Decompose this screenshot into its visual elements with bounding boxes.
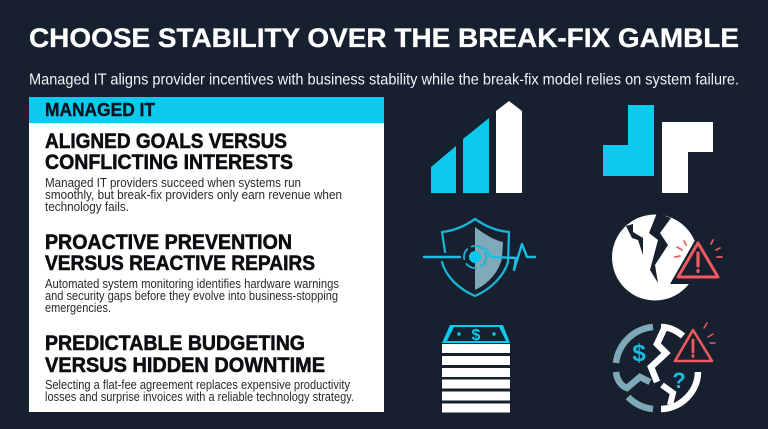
heading: aligned goals: ALIGNED GOALS VERSUS [45,130,287,153]
text: predictable budgeting description: losses and surprise invoices with a reliable technology strategy. [45,389,354,404]
icon: cracked circle with warning [612,213,726,300]
icon: broken budget ring with warning: $ [632,340,646,367]
icon: broken budget ring with warning: ? [672,368,686,393]
heading: proactive prevention [45,231,315,275]
heading: proactive prevention: VERSUS REACTIVE REPAIRS [45,252,315,275]
icon: rising bars [431,101,522,193]
panel background [29,97,384,412]
text: proactive prevention description: Automated system monitoring identifies hardware warnings [45,276,339,291]
heading: aligned goals [45,130,293,174]
icon: broken budget ring with warning [616,323,715,409]
heading: predictable budgeting: VERSUS HIDDEN DOWNTIME [45,354,325,377]
section: predictable budgeting [45,332,354,404]
text: aligned goals description: technology fails. [45,199,129,214]
text: proactive prevention description: emergencies. [45,300,111,315]
icon: shield with heartbeat [424,219,535,296]
heading: aligned goals: CONFLICTING INTERESTS [45,151,293,174]
heading: predictable budgeting [45,332,325,377]
section: aligned goals [45,130,342,214]
title: CHOOSE STABILITY OVER THE BREAK-FIX GAMBLE [29,23,739,53]
text: proactive prevention description: and security gaps before they evolve into business-stopping [45,288,338,303]
panel header [29,97,384,123]
text: aligned goals description [45,175,342,214]
text: aligned goals description: smoothly, but break-fix providers only earn revenue when [45,187,342,202]
section: proactive prevention [45,231,339,315]
text: predictable budgeting description: Selecting a flat-fee agreement replaces expensive productivity [45,377,350,392]
icon: stack of cash: $ [472,327,481,344]
text: aligned goals description: Managed IT providers succeed when systems run [45,175,301,190]
heading: proactive prevention: PROACTIVE PREVENTION [45,231,292,254]
text: proactive prevention description [45,276,339,315]
panel: managed IT [29,97,384,412]
text: predictable budgeting description [45,377,354,404]
panel header: MANAGED IT [45,100,155,120]
icon: conflicting pieces [603,105,713,193]
icon: stack of cash [442,325,510,412]
heading: predictable budgeting: PREDICTABLE BUDGETING [45,332,305,355]
subtitle: Managed IT aligns provider incentives with business stability while the break-fix model relies on system failure. [29,72,739,88]
